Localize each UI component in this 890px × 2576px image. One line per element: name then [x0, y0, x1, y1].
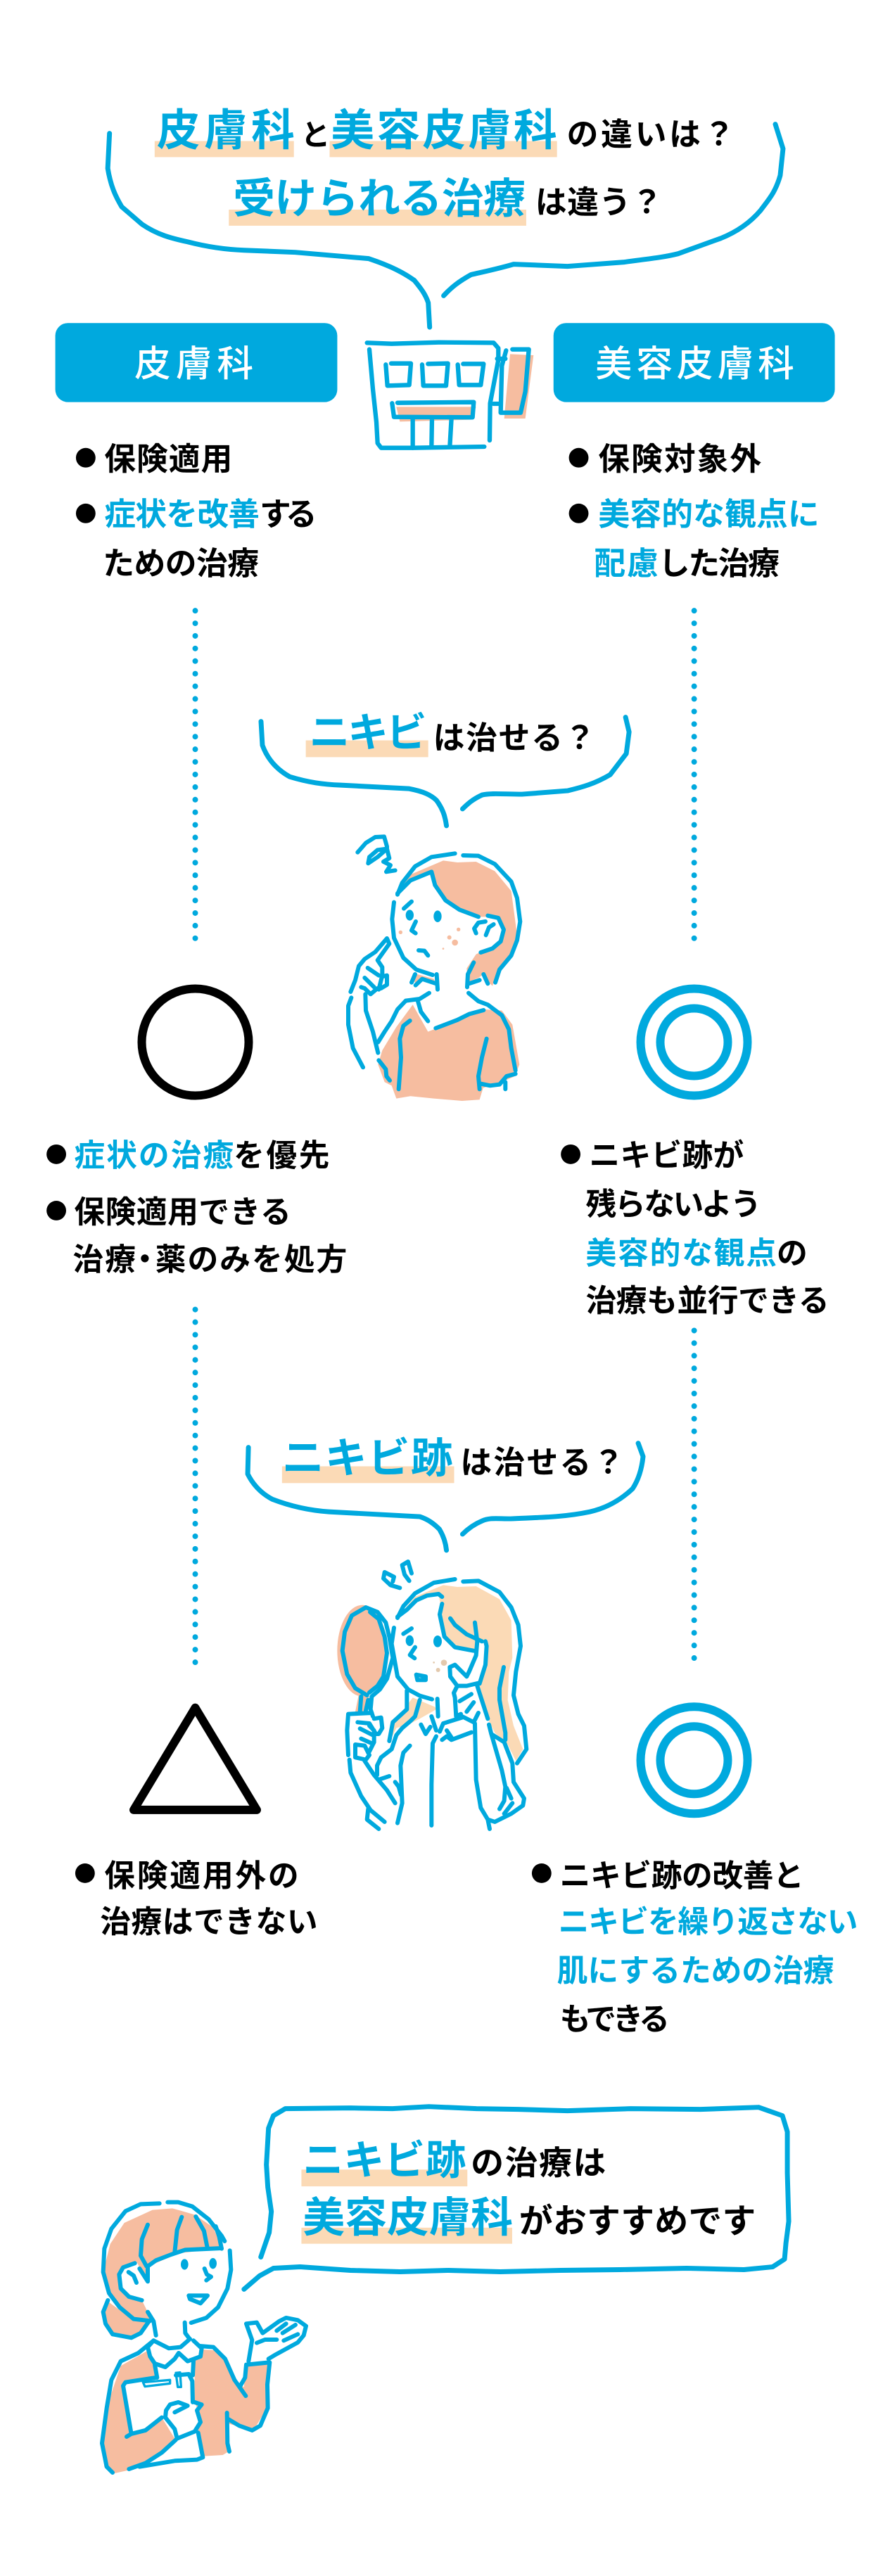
- title: [155, 106, 735, 226]
- dotted connector lines lower: [195, 1310, 694, 1668]
- title: と: [301, 118, 330, 151]
- text: 皮膚科 acne treatment: [46, 1138, 347, 1277]
- header: 美容皮膚科: [554, 323, 835, 402]
- acne question bubble: [261, 718, 629, 826]
- title: 受けられる治療: [233, 175, 526, 222]
- illustration: woman with acne: [348, 836, 520, 1101]
- recommendation text: がおすすめです: [519, 2203, 756, 2240]
- icon: double circle mark upper: [640, 989, 747, 1096]
- heading: ニキビは治せる？: は治せる？: [433, 720, 595, 755]
- title: 皮膚科: [157, 106, 295, 155]
- icon: triangle mark: [134, 1708, 257, 1810]
- text: 美容皮膚科 acne treatment: ニキビ跡が: [589, 1138, 744, 1173]
- recommendation text: ニキビ跡: [303, 2138, 466, 2183]
- recommendation speech bubble: [244, 2107, 789, 2289]
- header: 皮膚科: 皮膚科: [134, 343, 253, 384]
- text: 皮膚科 features: [76, 442, 317, 581]
- recommendation text: 美容皮膚科: [303, 2194, 513, 2241]
- title speech bubble: [108, 125, 783, 327]
- title: 美容皮膚科: [331, 106, 557, 155]
- text: 美容皮膚科 acne treatment: 治療も並行できる: [585, 1284, 829, 1318]
- heading: ニキビ跡は治せる？: [282, 1434, 624, 1483]
- text: 美容皮膚科 features: 保険対象外: [598, 442, 761, 477]
- text: 皮膚科 acne treatment: ・: [129, 1243, 160, 1277]
- text: 皮膚科 features: 保険適用: [104, 442, 232, 477]
- text: 皮膚科 scar treatment: [75, 1858, 318, 1939]
- text: 皮膚科 features: 症状を改善: [104, 497, 260, 533]
- recommendation text: の治療は: [471, 2145, 606, 2181]
- text: 美容皮膚科 acne treatment: 残らないよう: [585, 1187, 761, 1222]
- text: 皮膚科 features: ための治療: [103, 546, 259, 581]
- text: 美容皮膚科 scar treatment: [532, 1858, 858, 2036]
- text: 美容皮膚科 features: 配慮: [594, 546, 659, 581]
- text: 皮膚科 scar treatment: 治療はできない: [100, 1905, 318, 1939]
- text: 美容皮膚科 acne treatment: [561, 1138, 829, 1318]
- text: 皮膚科 acne treatment: 治療: [72, 1243, 136, 1277]
- heading: ニキビ跡は治せる？: ニキビ跡: [282, 1434, 453, 1481]
- dotted connector lines upper: [195, 611, 694, 947]
- recommendation text: [301, 2138, 756, 2244]
- heading: ニキビ跡は治せる？: は治せる？: [460, 1445, 624, 1480]
- title: は違う？: [535, 185, 663, 220]
- text: 皮膚科 acne treatment: 症状の治癒: [74, 1138, 234, 1173]
- text: 美容皮膚科 acne treatment: の: [777, 1237, 808, 1271]
- text: 美容皮膚科 features: した治療: [659, 546, 780, 581]
- illustration: woman with mirror: [337, 1562, 526, 1829]
- text: 美容皮膚科 scar treatment: ニキビ跡の改善と: [560, 1858, 804, 1893]
- title: の違いは？: [567, 117, 735, 152]
- icon: clinic building: [367, 343, 533, 448]
- illustration: nurse with clipboard: [102, 2202, 306, 2474]
- acne scar question bubble: [248, 1443, 643, 1550]
- heading: ニキビは治せる？: ニキビ: [310, 710, 427, 755]
- text: 皮膚科 acne treatment: 薬のみを処方: [155, 1243, 347, 1277]
- header: 美容皮膚科: 美容皮膚科: [595, 343, 794, 384]
- icon: circle mark: [142, 989, 249, 1096]
- text: 美容皮膚科 scar treatment: ニキビを繰り返さない: [559, 1905, 858, 1939]
- heading: ニキビは治せる？: [306, 710, 595, 757]
- text: 皮膚科 acne treatment: を優先: [234, 1138, 329, 1173]
- text: 美容皮膚科 scar treatment: もできる: [560, 2002, 670, 2036]
- text: 皮膚科 acne treatment: 保険適用できる: [74, 1195, 291, 1230]
- text: 皮膚科 scar treatment: 保険適用外の: [104, 1858, 299, 1893]
- text: 皮膚科 features: する: [260, 497, 317, 533]
- text: 美容皮膚科 acne treatment: 美容的な観点: [585, 1237, 777, 1271]
- text: 美容皮膚科 scar treatment: 肌にするための治療: [557, 1954, 834, 1989]
- icon: double circle mark lower: [640, 1707, 747, 1813]
- header: 皮膚科: [56, 323, 337, 402]
- text: 美容皮膚科 features: [569, 442, 820, 581]
- text: 美容皮膚科 features: 美容的な観点に: [598, 497, 820, 533]
